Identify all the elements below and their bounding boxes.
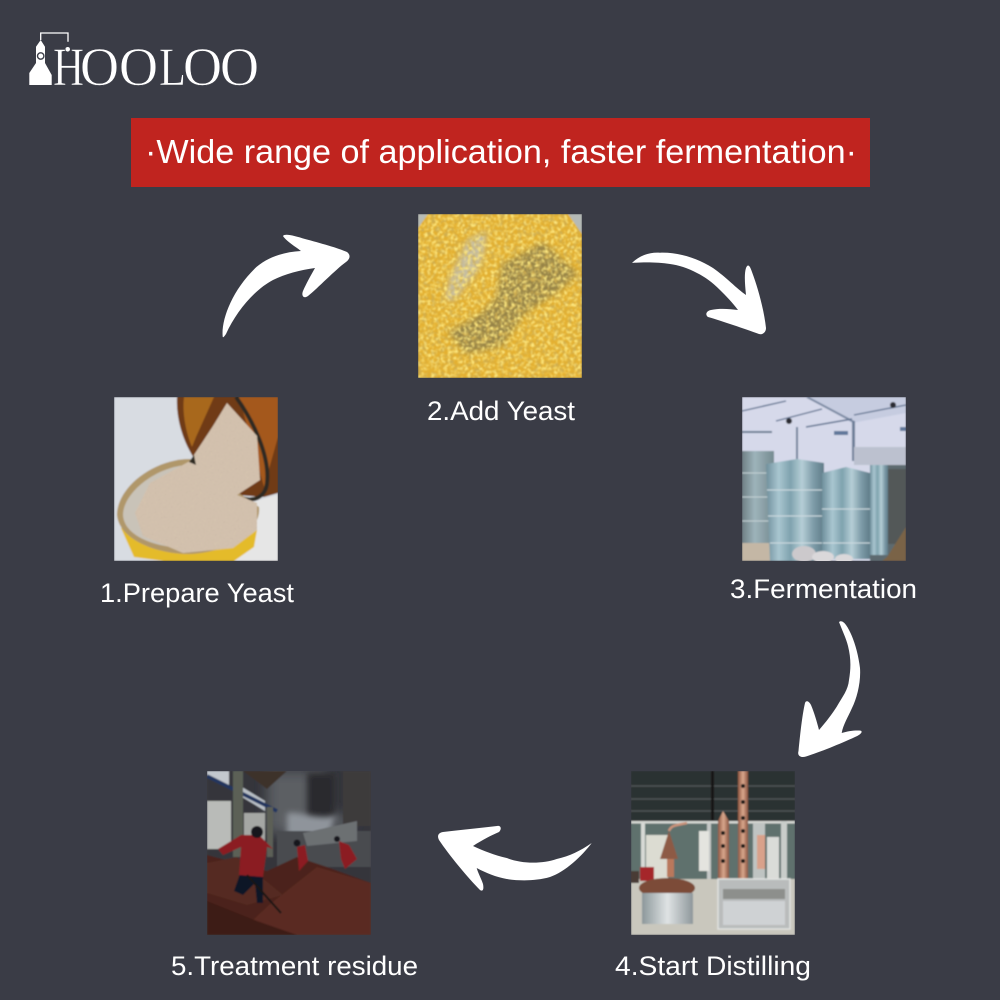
arrow: step 3 to step 4	[798, 621, 862, 757]
banner heading: ·Wide range of application, faster fermentation·	[145, 134, 857, 171]
panel: step 4 start distilling	[615, 771, 811, 981]
logo wordmark: L	[159, 37, 186, 97]
arrow: step 1 to step 2	[223, 235, 350, 337]
photo: yeast poured from jar	[114, 397, 278, 561]
label: step 5: 5.Treatment residue	[171, 951, 418, 981]
label: step 1: 1.Prepare Yeast	[100, 578, 295, 608]
photo: workers shovelling residue	[207, 771, 371, 935]
photo: corn with yeast	[418, 214, 582, 378]
tanks	[742, 451, 774, 545]
logo wordmark: O	[183, 37, 222, 97]
arrow: step 4 to step 5	[438, 826, 592, 891]
worker back	[297, 845, 308, 871]
yeast	[136, 402, 262, 554]
control frame	[718, 879, 790, 929]
jar	[177, 397, 278, 497]
label: step 4: 4.Start Distilling	[615, 951, 811, 981]
photo: fermentation tanks	[742, 397, 906, 564]
panel: step 1 prepare yeast	[100, 397, 295, 608]
piles	[207, 855, 362, 920]
banner heading	[131, 118, 870, 187]
logo wordmark	[53, 37, 259, 97]
photo: copper distilling column	[631, 771, 795, 935]
logo wordmark: H	[53, 37, 84, 97]
still pot	[638, 877, 696, 894]
lid	[120, 527, 258, 561]
icon: still silhouette	[29, 33, 70, 85]
logo wordmark: O	[220, 37, 259, 97]
arrow: step 2 to step 3	[632, 253, 766, 334]
logo wordmark: O	[119, 37, 158, 97]
logo: Hooloo	[29, 33, 259, 97]
columns	[738, 771, 748, 879]
worker main	[234, 871, 263, 903]
panel: step 3 fermentation	[730, 397, 917, 604]
logo wordmark: O	[80, 37, 119, 97]
panel: step 5 treatment residue	[171, 771, 418, 981]
label: step 3: 3.Fermentation	[730, 574, 917, 604]
panel: step 2 add yeast	[418, 214, 582, 426]
label: step 2: 2.Add Yeast	[427, 396, 576, 426]
